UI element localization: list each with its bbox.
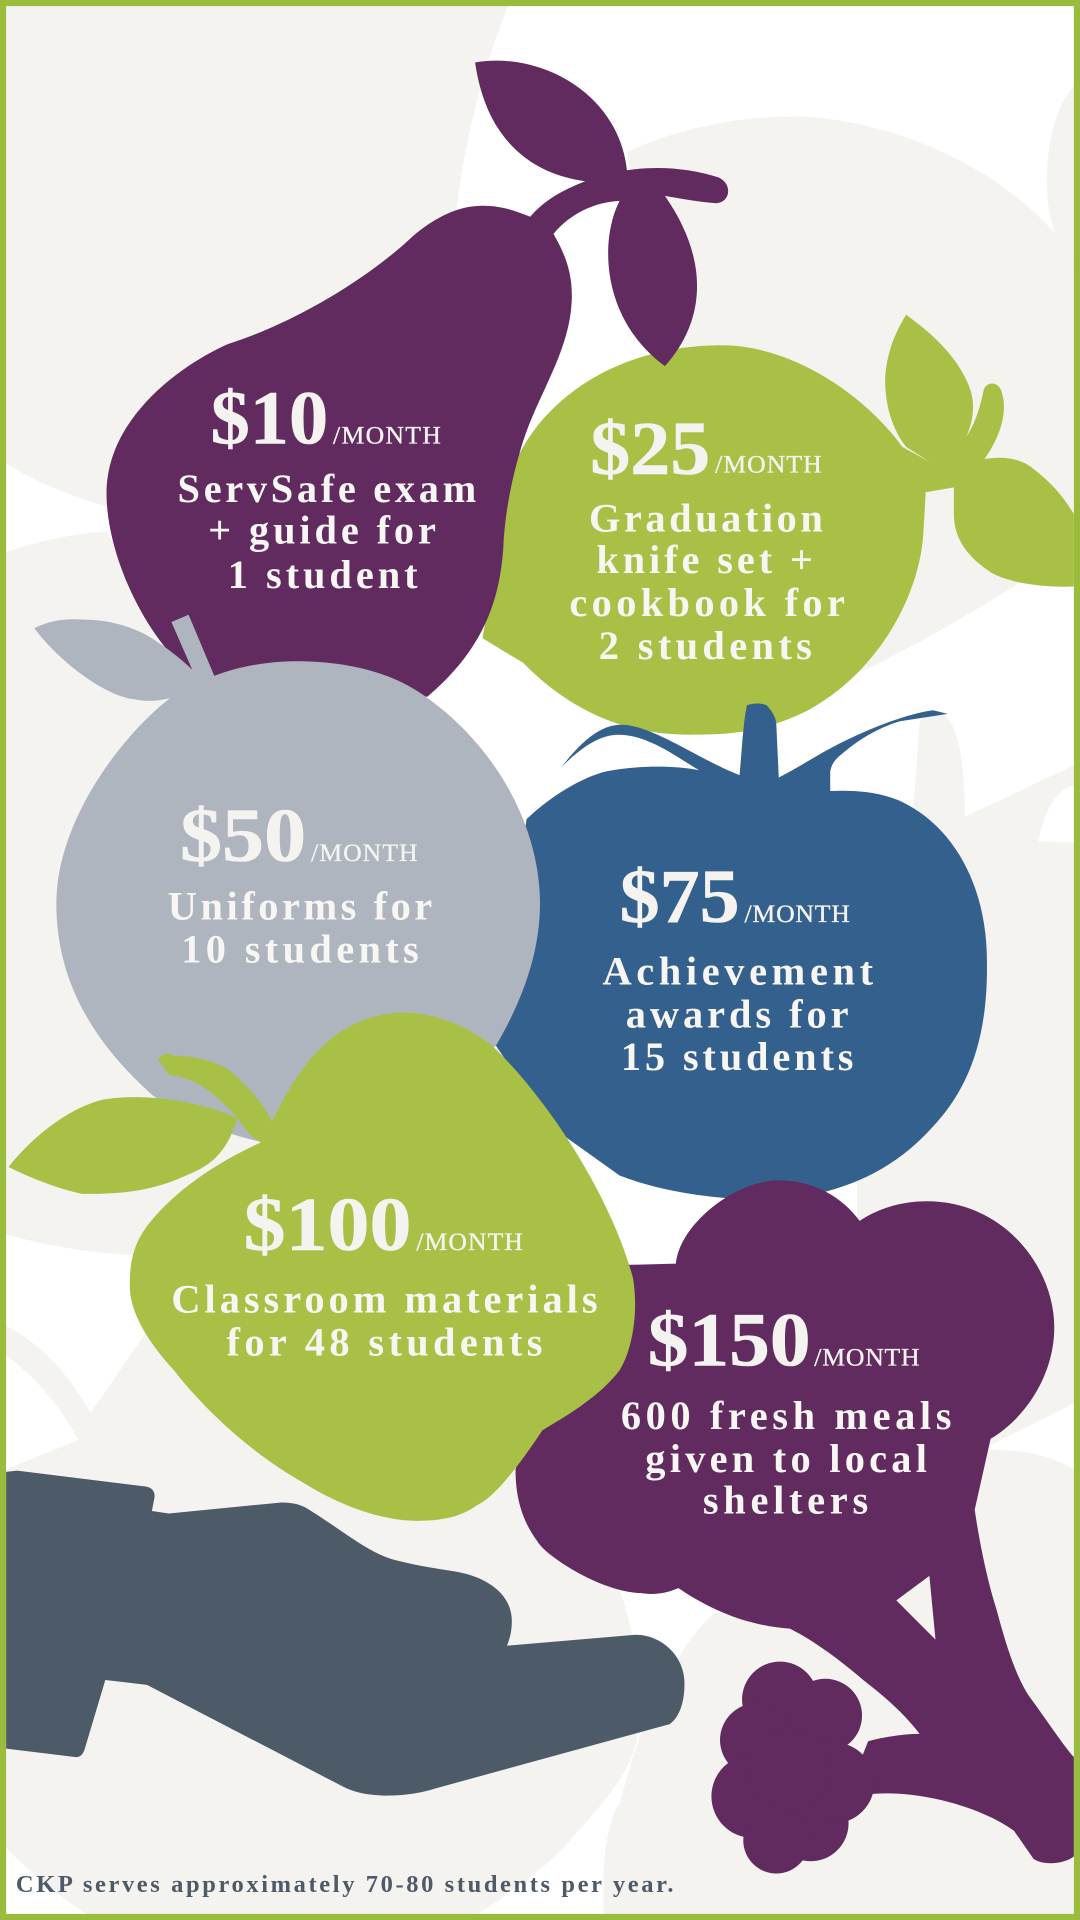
icon: apple shape with leaf and stem xyxy=(9,1013,635,1521)
text block: $75: Achievement xyxy=(602,948,874,993)
text block: $100: Classroom materials xyxy=(171,1277,598,1322)
icon: open hand xyxy=(6,1471,684,1796)
panel: broccoli $150 xyxy=(516,1180,1074,1873)
text block: $10: ServSafe exam xyxy=(178,466,476,511)
text block: $10: $10 xyxy=(211,376,328,460)
text block: $150: $150 xyxy=(648,1298,811,1382)
text block: $150: /MONTH xyxy=(814,1342,920,1371)
text block: $25: 2 students xyxy=(599,623,812,668)
panel: lime $25 xyxy=(482,315,1074,735)
text block: $10: + guide for xyxy=(208,508,436,553)
footnote: CKP serves approximately 70-80 students per year. xyxy=(16,1871,673,1898)
panel: pear $10 xyxy=(107,61,728,697)
panel: green apple $100 xyxy=(9,1013,635,1521)
panel: gray apple $50 xyxy=(34,615,540,1141)
text block: $150: given to local xyxy=(645,1436,927,1481)
icon: pear shape with leaves and stem xyxy=(107,61,728,697)
text block: $25: cookbook for xyxy=(569,580,845,625)
text block: $75: awards for xyxy=(626,991,849,1036)
text block: $25: /MONTH xyxy=(715,450,822,479)
text block: $75 xyxy=(602,855,874,1079)
text block: $25: Graduation xyxy=(589,495,823,540)
text block: $75: /MONTH xyxy=(744,899,850,928)
icon: lime shape with leaves xyxy=(482,315,1074,735)
text block: $100: $100 xyxy=(244,1183,411,1267)
text block: $25 xyxy=(569,407,845,668)
text block: $50: $50 xyxy=(180,794,306,878)
text block: $50 xyxy=(168,794,432,971)
text block: $10: 1 student xyxy=(228,552,418,597)
icon: small broccoli floret xyxy=(711,1662,874,1873)
text block: $150: 600 fresh meals xyxy=(621,1393,951,1438)
icon: tomato shape xyxy=(496,703,987,1200)
text block: $100: /MONTH xyxy=(416,1227,523,1256)
text block: $100: for 48 students xyxy=(227,1320,542,1365)
icon: broccoli shape xyxy=(516,1180,1074,1863)
text block: $50: /MONTH xyxy=(311,838,418,867)
text block: $150: shelters xyxy=(703,1477,868,1522)
text block: $50: 10 students xyxy=(181,926,419,971)
text block: $75: 15 students xyxy=(621,1034,853,1079)
panel: tomato $75 xyxy=(496,703,987,1200)
icon: apple shape with leaf xyxy=(34,615,540,1141)
text block: $25: $25 xyxy=(590,407,710,491)
text block: $50: Uniforms for xyxy=(168,884,432,929)
text block: $100 xyxy=(171,1183,598,1365)
text block: $10: /MONTH xyxy=(333,420,441,449)
text block: $75: $75 xyxy=(620,855,740,939)
text block: $25: knife set + xyxy=(596,537,813,582)
text block: $10 xyxy=(178,376,476,597)
text block: $150 xyxy=(621,1298,951,1522)
